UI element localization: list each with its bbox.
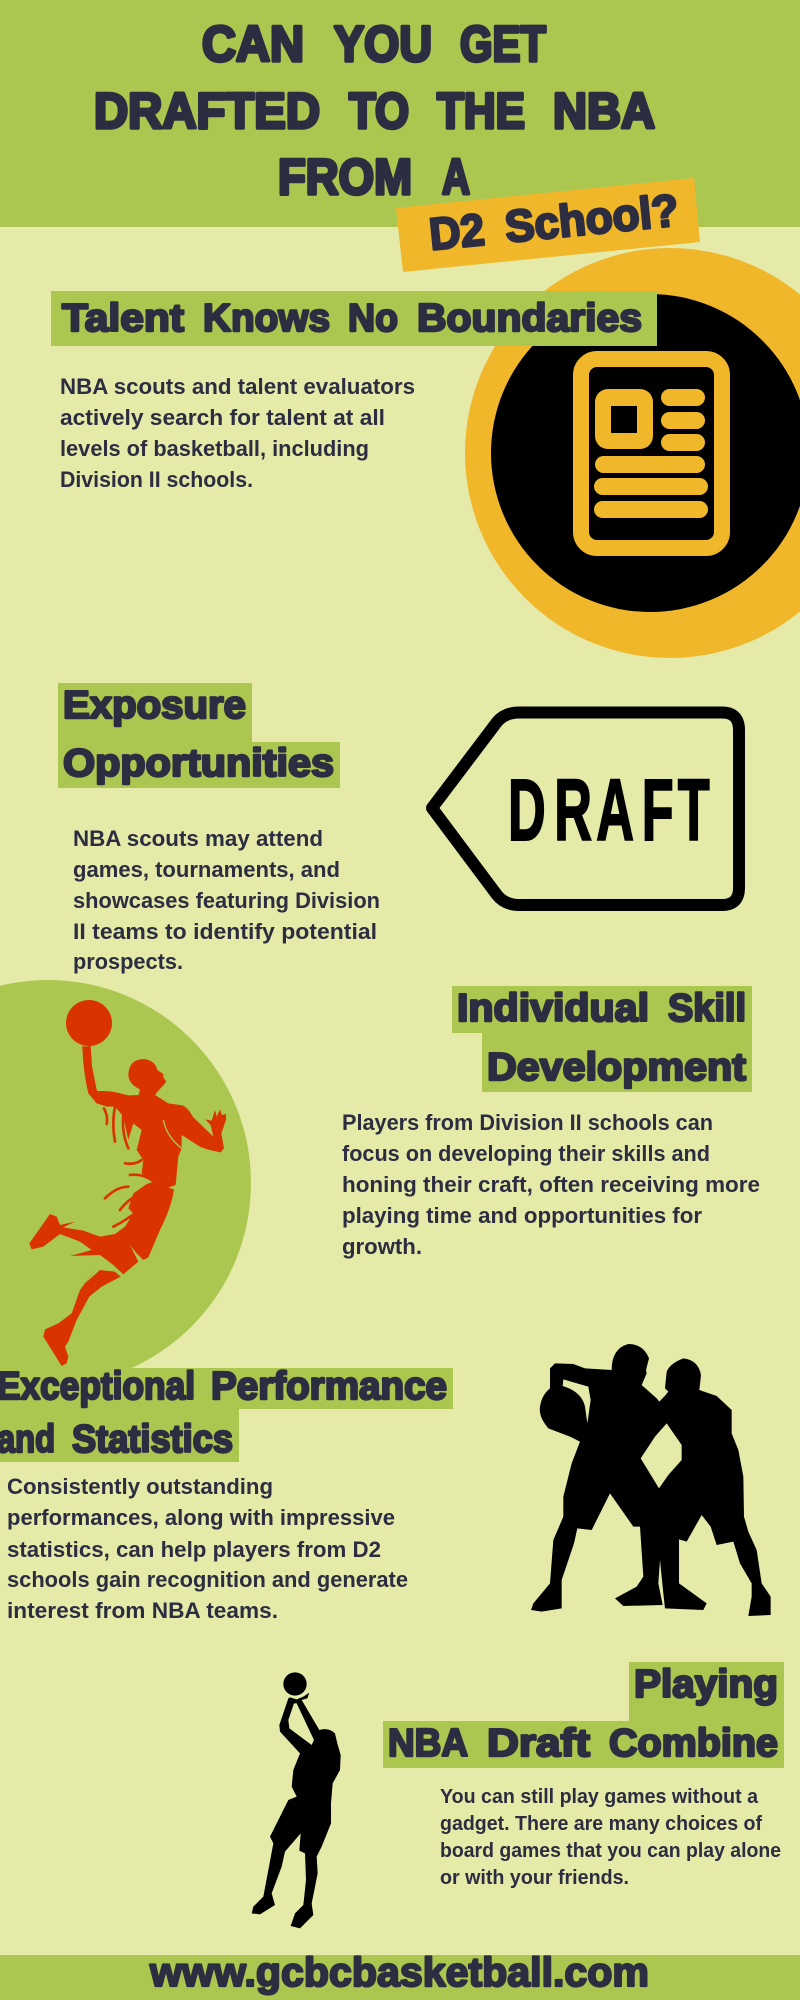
body text: combine: or with your friends. <box>440 1867 629 1889</box>
body text: exposure: showcases featuring Division <box>73 888 380 913</box>
body text: exposure <box>73 826 380 974</box>
heading: Individual Skill Development: Individual <box>457 987 649 1030</box>
icon: newspaper in yellow and black circle <box>465 248 800 658</box>
badge: D2 School?: D2 <box>427 204 487 260</box>
body text: skill development: growth. <box>342 1234 422 1259</box>
body text: performance: interest from NBA teams. <box>7 1598 278 1623</box>
header band with title: NBA <box>553 83 655 139</box>
body text: talent: actively search for talent at all <box>60 405 385 430</box>
body text: talent <box>60 374 415 492</box>
body text: talent: NBA scouts and talent evaluators <box>60 374 415 399</box>
heading: Playing NBA Draft Combine: NBA <box>388 1722 468 1765</box>
heading: Individual Skill Development: Development <box>487 1046 746 1089</box>
header band with title: CAN <box>202 16 304 72</box>
header band with title: FROM <box>278 149 412 205</box>
body text: combine: You can still play games without a <box>440 1786 759 1808</box>
heading: Playing NBA Draft Combine <box>383 1662 784 1768</box>
heading: Exposure Opportunities <box>58 683 340 788</box>
body text: exposure: prospects. <box>73 949 183 974</box>
body text: combine: board games that you can play alone <box>440 1840 781 1862</box>
body text: skill development: playing time and opportunities for <box>342 1203 702 1228</box>
header band with title: YOU <box>334 16 432 72</box>
heading: Talent Knows No Boundaries: Boundaries <box>417 297 642 340</box>
body text: skill development <box>342 1110 760 1259</box>
heading: Individual Skill Development: Skill <box>668 987 746 1030</box>
header band with title: TO <box>349 83 409 139</box>
body text: exposure: games, tournaments, and <box>73 857 340 882</box>
body text: skill development: Players from Division II schools can <box>342 1110 713 1135</box>
badge: D2 School?: School? <box>503 184 681 252</box>
icon: jump shot silhouette <box>252 1672 341 1928</box>
footer band with website <box>0 1949 800 2000</box>
header band with title: DRAFTED <box>94 83 320 139</box>
heading: Exceptional Performance and Statistics <box>0 1365 453 1462</box>
heading: Exposure Opportunities: Opportunities <box>63 742 334 785</box>
body text: performance: schools gain recognition and generate <box>7 1567 408 1592</box>
heading: Exceptional Performance and Statistics: Exceptional <box>0 1365 195 1408</box>
body text: talent: levels of basketball, including <box>60 436 369 461</box>
heading: Talent Knows No Boundaries: Knows <box>203 297 330 340</box>
body text: combine <box>440 1786 781 1889</box>
body text: talent: Division II schools. <box>60 467 253 492</box>
body text: performance <box>7 1474 408 1623</box>
heading: Talent Knows No Boundaries <box>51 291 657 346</box>
body text: performance: Consistently outstanding <box>7 1474 273 1499</box>
heading: Exceptional Performance and Statistics: Performance <box>211 1365 447 1408</box>
body text: exposure: II teams to identify potential <box>73 919 377 944</box>
body text: performance: statistics, can help players from D2 <box>7 1537 381 1562</box>
body text: exposure: NBA scouts may attend <box>73 826 323 851</box>
heading: Talent Knows No Boundaries: No <box>348 297 398 340</box>
heading: Exceptional Performance and Statistics: Statistics <box>72 1418 233 1461</box>
body text: performance: performances, along with impressive <box>7 1505 395 1530</box>
icon: two players silhouette <box>531 1344 771 1616</box>
heading: Playing NBA Draft Combine: Playing <box>634 1663 778 1706</box>
icon: draft tag: DRAFT <box>508 762 710 859</box>
heading: Individual Skill Development <box>452 986 752 1092</box>
body text: combine: gadget. There are many choices of <box>440 1813 762 1835</box>
header band with title: THE <box>437 83 525 139</box>
badge: D2 School? <box>396 178 700 272</box>
green circle behind flame player <box>0 980 251 1386</box>
body text: skill development: focus on developing their skills and <box>342 1141 710 1166</box>
header band with title <box>0 0 800 227</box>
heading: Playing NBA Draft Combine: Draft <box>487 1722 590 1765</box>
heading: Playing NBA Draft Combine: Combine <box>609 1722 778 1765</box>
heading: Talent Knows No Boundaries: Talent <box>62 297 184 340</box>
header band with title: GET <box>460 16 546 72</box>
heading: Exposure Opportunities: Exposure <box>63 684 246 727</box>
body text: skill development: honing their craft, often receiving more <box>342 1172 760 1197</box>
icon: draft tag <box>432 712 739 905</box>
icon: orange flame basketball player <box>29 1000 226 1366</box>
footer band with website: www.gcbcbasketball.com <box>149 1949 649 1995</box>
header band with title: A <box>442 149 470 205</box>
